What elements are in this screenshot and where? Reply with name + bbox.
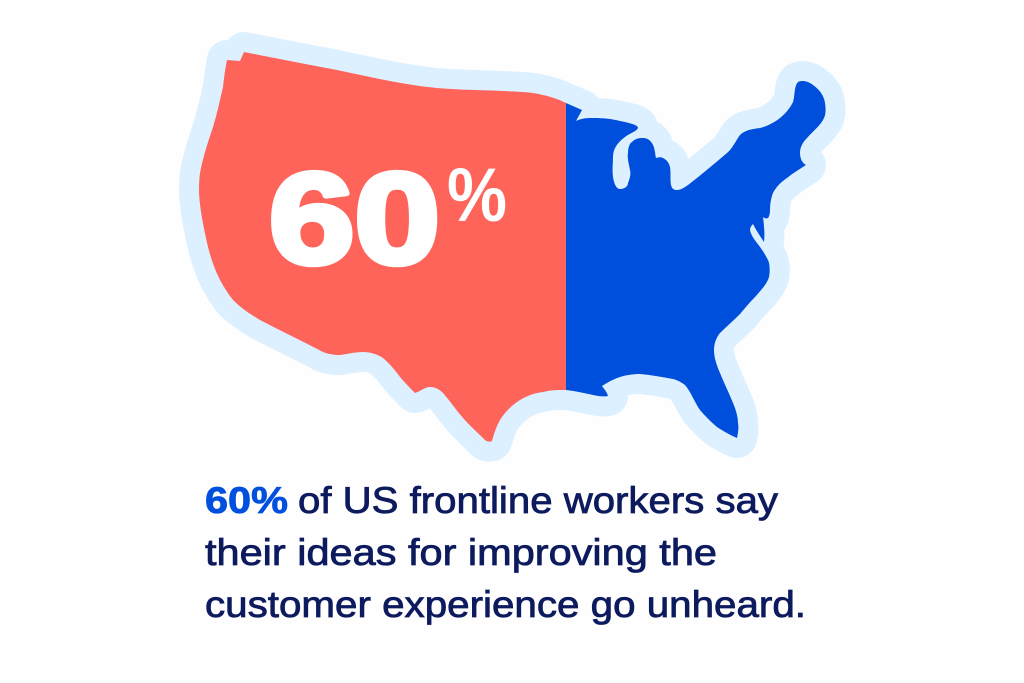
map halo outline [199, 52, 826, 442]
map west region (60%) [199, 52, 582, 442]
big statistic: 60% [269, 147, 507, 291]
US map infographic [199, 52, 826, 442]
big statistic: 60%: 60 [269, 147, 440, 291]
caption highlight: 60%: 60% [205, 480, 288, 521]
caption line 2: their ideas for improving the [205, 532, 717, 573]
caption line 1: of US frontline workers say [298, 480, 779, 521]
caption line 3: customer experience go unheard. [205, 584, 806, 625]
map east region (40%) [550, 81, 826, 438]
big statistic: 60%: % [447, 153, 507, 238]
caption text [205, 480, 806, 625]
